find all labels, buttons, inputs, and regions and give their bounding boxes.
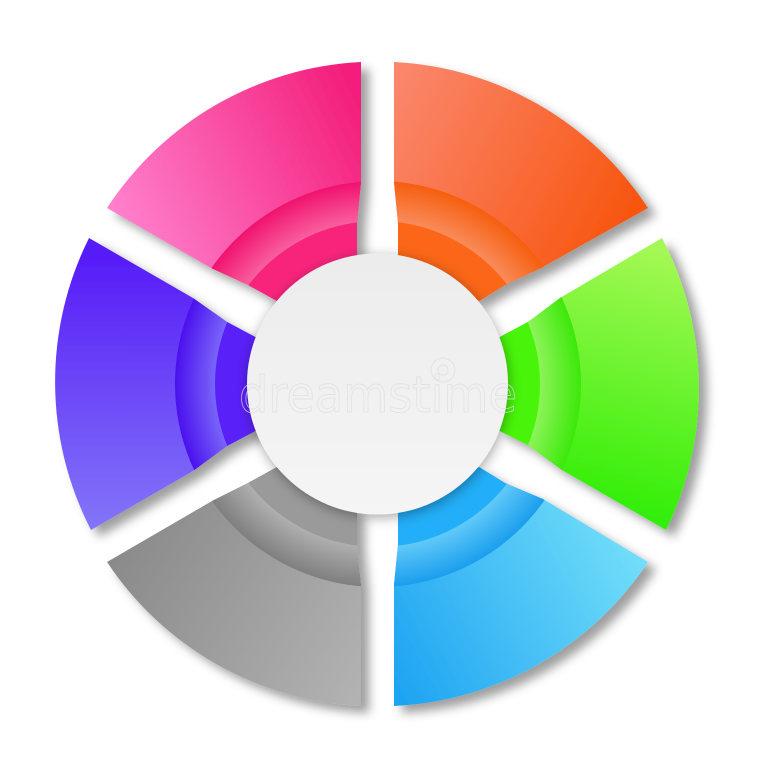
- segment: blue: [394, 467, 660, 719]
- segment: orange: [394, 62, 660, 312]
- segment: pink: [107, 62, 376, 308]
- segment: purple: [55, 238, 262, 541]
- center circle: [247, 254, 508, 514]
- segment: green: [499, 238, 714, 541]
- segmented circle infographic: [55, 62, 714, 719]
- segment: gray: [107, 467, 376, 719]
- watermark: dreamstime: [239, 366, 517, 424]
